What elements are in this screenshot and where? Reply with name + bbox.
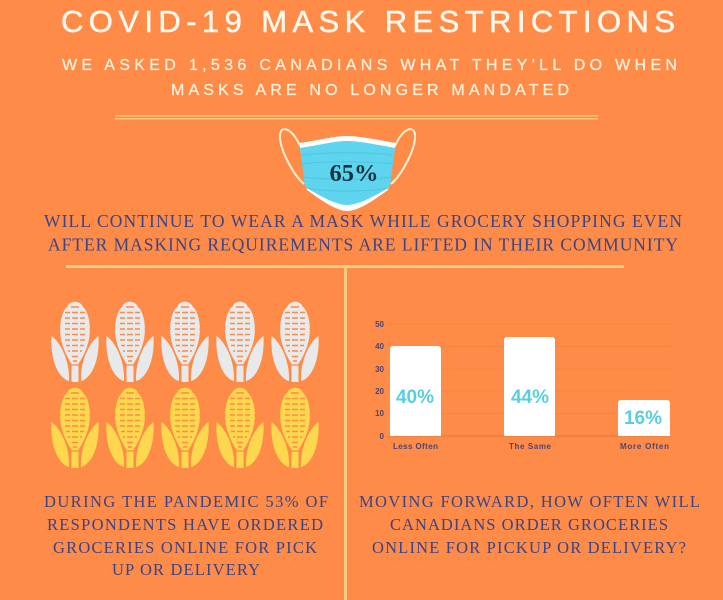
y axis labels: 30 — [375, 365, 385, 374]
right caption: ONLINE FOR PICKUP OR DELIVERY? — [372, 538, 686, 557]
bar chart — [375, 320, 670, 451]
bar values: 16% — [624, 408, 662, 429]
bar values: 44% — [511, 387, 549, 408]
y axis labels: 40 — [375, 342, 385, 351]
subtitle: MASKS ARE NO LONGER MANDATED — [171, 82, 569, 99]
bar category labels: The Same — [509, 442, 552, 451]
y axis labels — [375, 320, 385, 441]
bar: more often — [618, 400, 670, 436]
y axis labels: 0 — [380, 432, 385, 441]
mask finding text — [44, 211, 682, 254]
icon: face mask with 65% — [280, 129, 415, 211]
left caption: RESPONDENTS HAVE ORDERED — [47, 515, 323, 534]
right caption: MOVING FORWARD, HOW OFTEN WILL — [359, 492, 700, 511]
bar category labels — [393, 442, 669, 451]
subtitle: WE ASKED 1,536 CANADIANS WHAT THEY'LL DO WHEN — [62, 57, 677, 74]
bar: less often — [390, 346, 441, 436]
mask finding text: WILL CONTINUE TO WEAR A MASK WHILE GROCERY SHOPPING EVEN — [44, 211, 682, 231]
right caption: CANADIANS ORDER GROCERIES — [390, 515, 668, 534]
mask percentage: 65% — [330, 160, 378, 187]
left caption: GROCERIES ONLINE FOR PICK — [53, 538, 317, 557]
y axis labels: 50 — [375, 320, 385, 329]
left caption: UP OR DELIVERY — [112, 560, 260, 579]
subtitle — [62, 57, 677, 99]
right caption — [359, 492, 700, 557]
y axis labels: 20 — [375, 387, 385, 396]
title: COVID-19 MASK RESTRICTIONS — [61, 4, 675, 39]
bar: the same — [504, 337, 555, 436]
left caption: DURING THE PANDEMIC 53% OF — [44, 492, 328, 511]
bar category labels: Less Often — [393, 442, 438, 451]
left caption — [44, 492, 328, 579]
bar values: 40% — [396, 387, 434, 408]
bar category labels: More Often — [620, 442, 669, 451]
mask finding text: AFTER MASKING REQUIREMENTS ARE LIFTED IN THEIR COMMUNITY — [48, 234, 678, 254]
y axis labels: 10 — [375, 409, 385, 418]
pictogram: corn row, not ordered online — [51, 301, 319, 382]
bar values — [396, 387, 662, 429]
pictogram: corn row, ordered online — [51, 387, 319, 468]
